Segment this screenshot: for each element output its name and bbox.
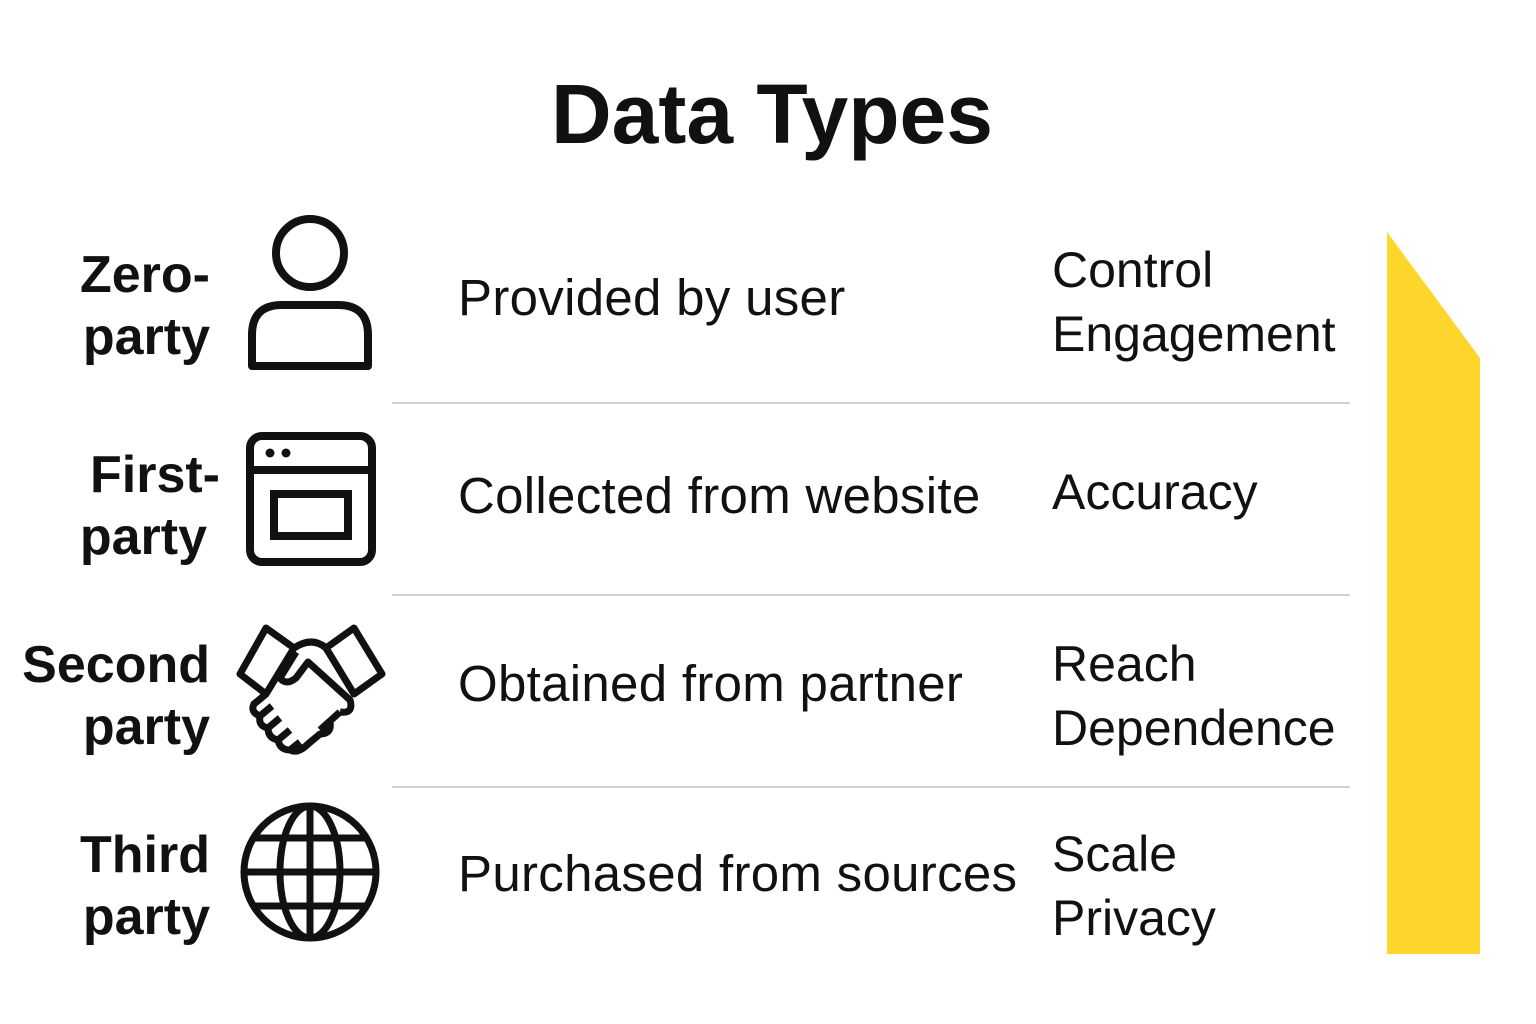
- benefits: Scale: [1052, 826, 1177, 882]
- description: Purchased from sources: [458, 845, 1017, 902]
- icon: handshake: [236, 624, 386, 755]
- row: zero-party: [80, 215, 1336, 370]
- label: second party: party: [83, 698, 210, 756]
- description: Collected from website: [458, 467, 980, 524]
- row: second party: [22, 624, 1336, 756]
- benefits: [1052, 242, 1336, 362]
- description: Provided by user: [458, 269, 846, 326]
- benefits: Control: [1052, 242, 1213, 298]
- description: Obtained from partner: [458, 655, 963, 712]
- label: third party: party: [83, 888, 210, 946]
- benefits: [1052, 636, 1336, 756]
- benefits: [1052, 826, 1216, 946]
- icon: globe: [240, 802, 380, 942]
- label: third party: Third: [80, 826, 210, 884]
- icon: person: [248, 215, 372, 370]
- label: zero-party: party: [83, 308, 210, 366]
- title: Data Types: [551, 67, 993, 161]
- icon: browser window: [246, 432, 376, 566]
- row: third party: [80, 802, 1216, 946]
- label: second party: [22, 636, 210, 756]
- label: zero-party: [80, 246, 210, 366]
- benefits: Engagement: [1052, 306, 1336, 362]
- benefits: Reach: [1052, 636, 1197, 692]
- row: first-party: [80, 432, 1258, 566]
- label: zero-party: Zero-: [80, 246, 210, 304]
- label: second party: Second: [22, 636, 210, 694]
- benefits: Accuracy: [1052, 464, 1258, 520]
- label: third party: [80, 826, 210, 946]
- yellow arrow bar: [1387, 232, 1480, 954]
- label: first-party: party: [80, 508, 207, 566]
- benefits: Dependence: [1052, 700, 1336, 756]
- benefits: Privacy: [1052, 890, 1216, 946]
- label: first-party: [80, 446, 220, 566]
- label: first-party: First-: [90, 446, 220, 504]
